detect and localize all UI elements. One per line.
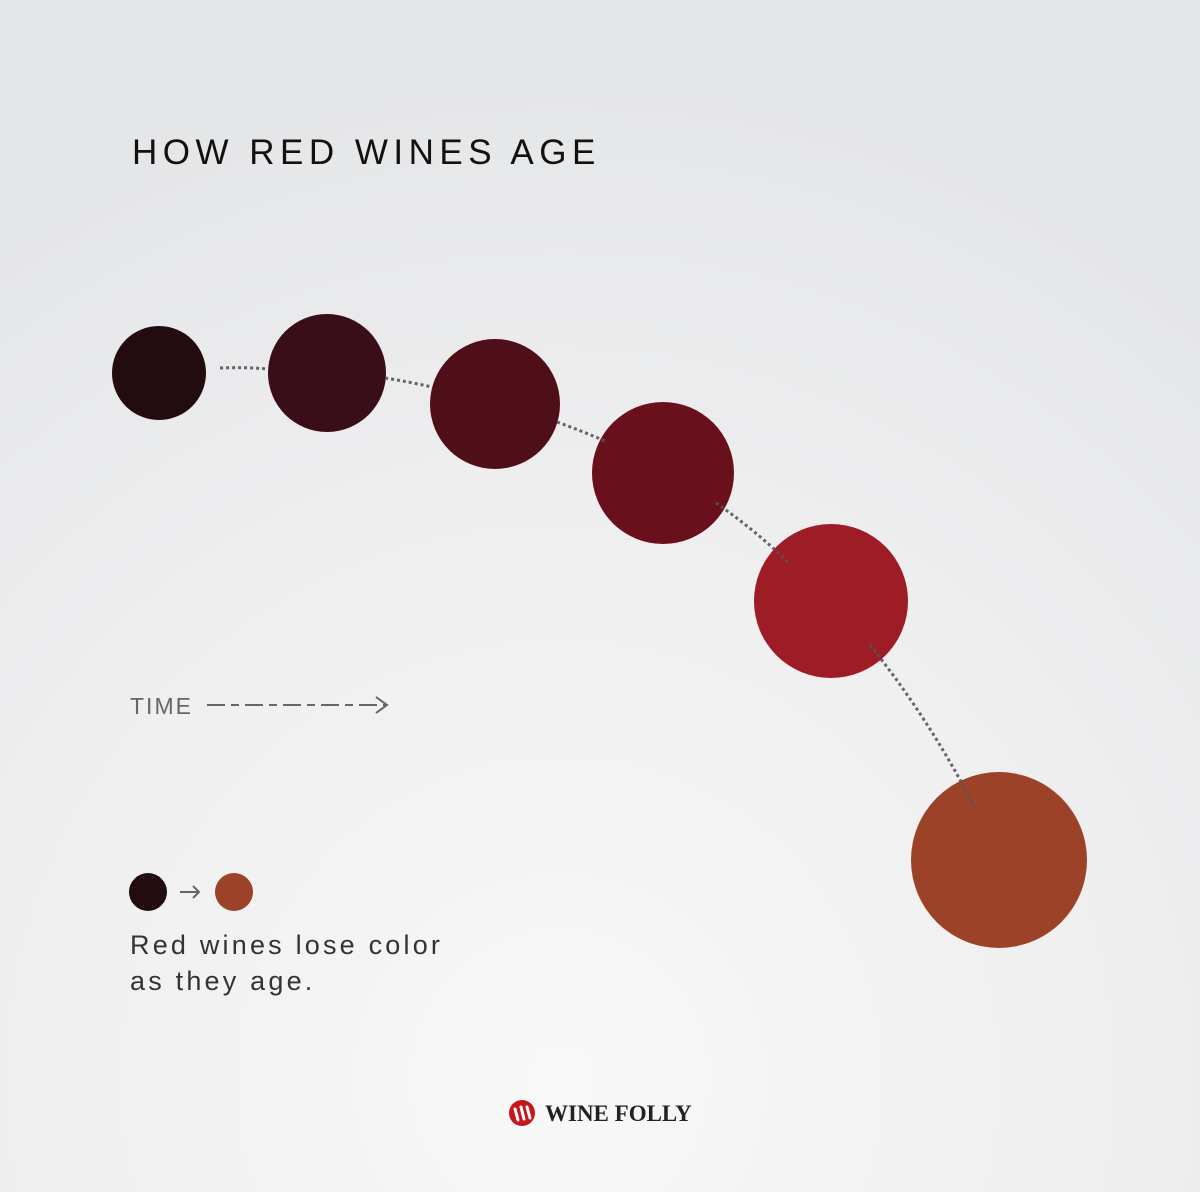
- circles: wine aging stages: [112, 314, 1087, 948]
- legend: Red wines lose color: [130, 930, 443, 960]
- logo: WINE FOLLY: [545, 1101, 692, 1126]
- legend: as they age.: [130, 966, 316, 996]
- legend: [129, 873, 443, 996]
- title: HOW RED WINES AGE: [132, 133, 601, 172]
- dotted connectors: [220, 368, 975, 808]
- time arrow: [130, 693, 387, 719]
- time arrow: TIME: [130, 693, 193, 719]
